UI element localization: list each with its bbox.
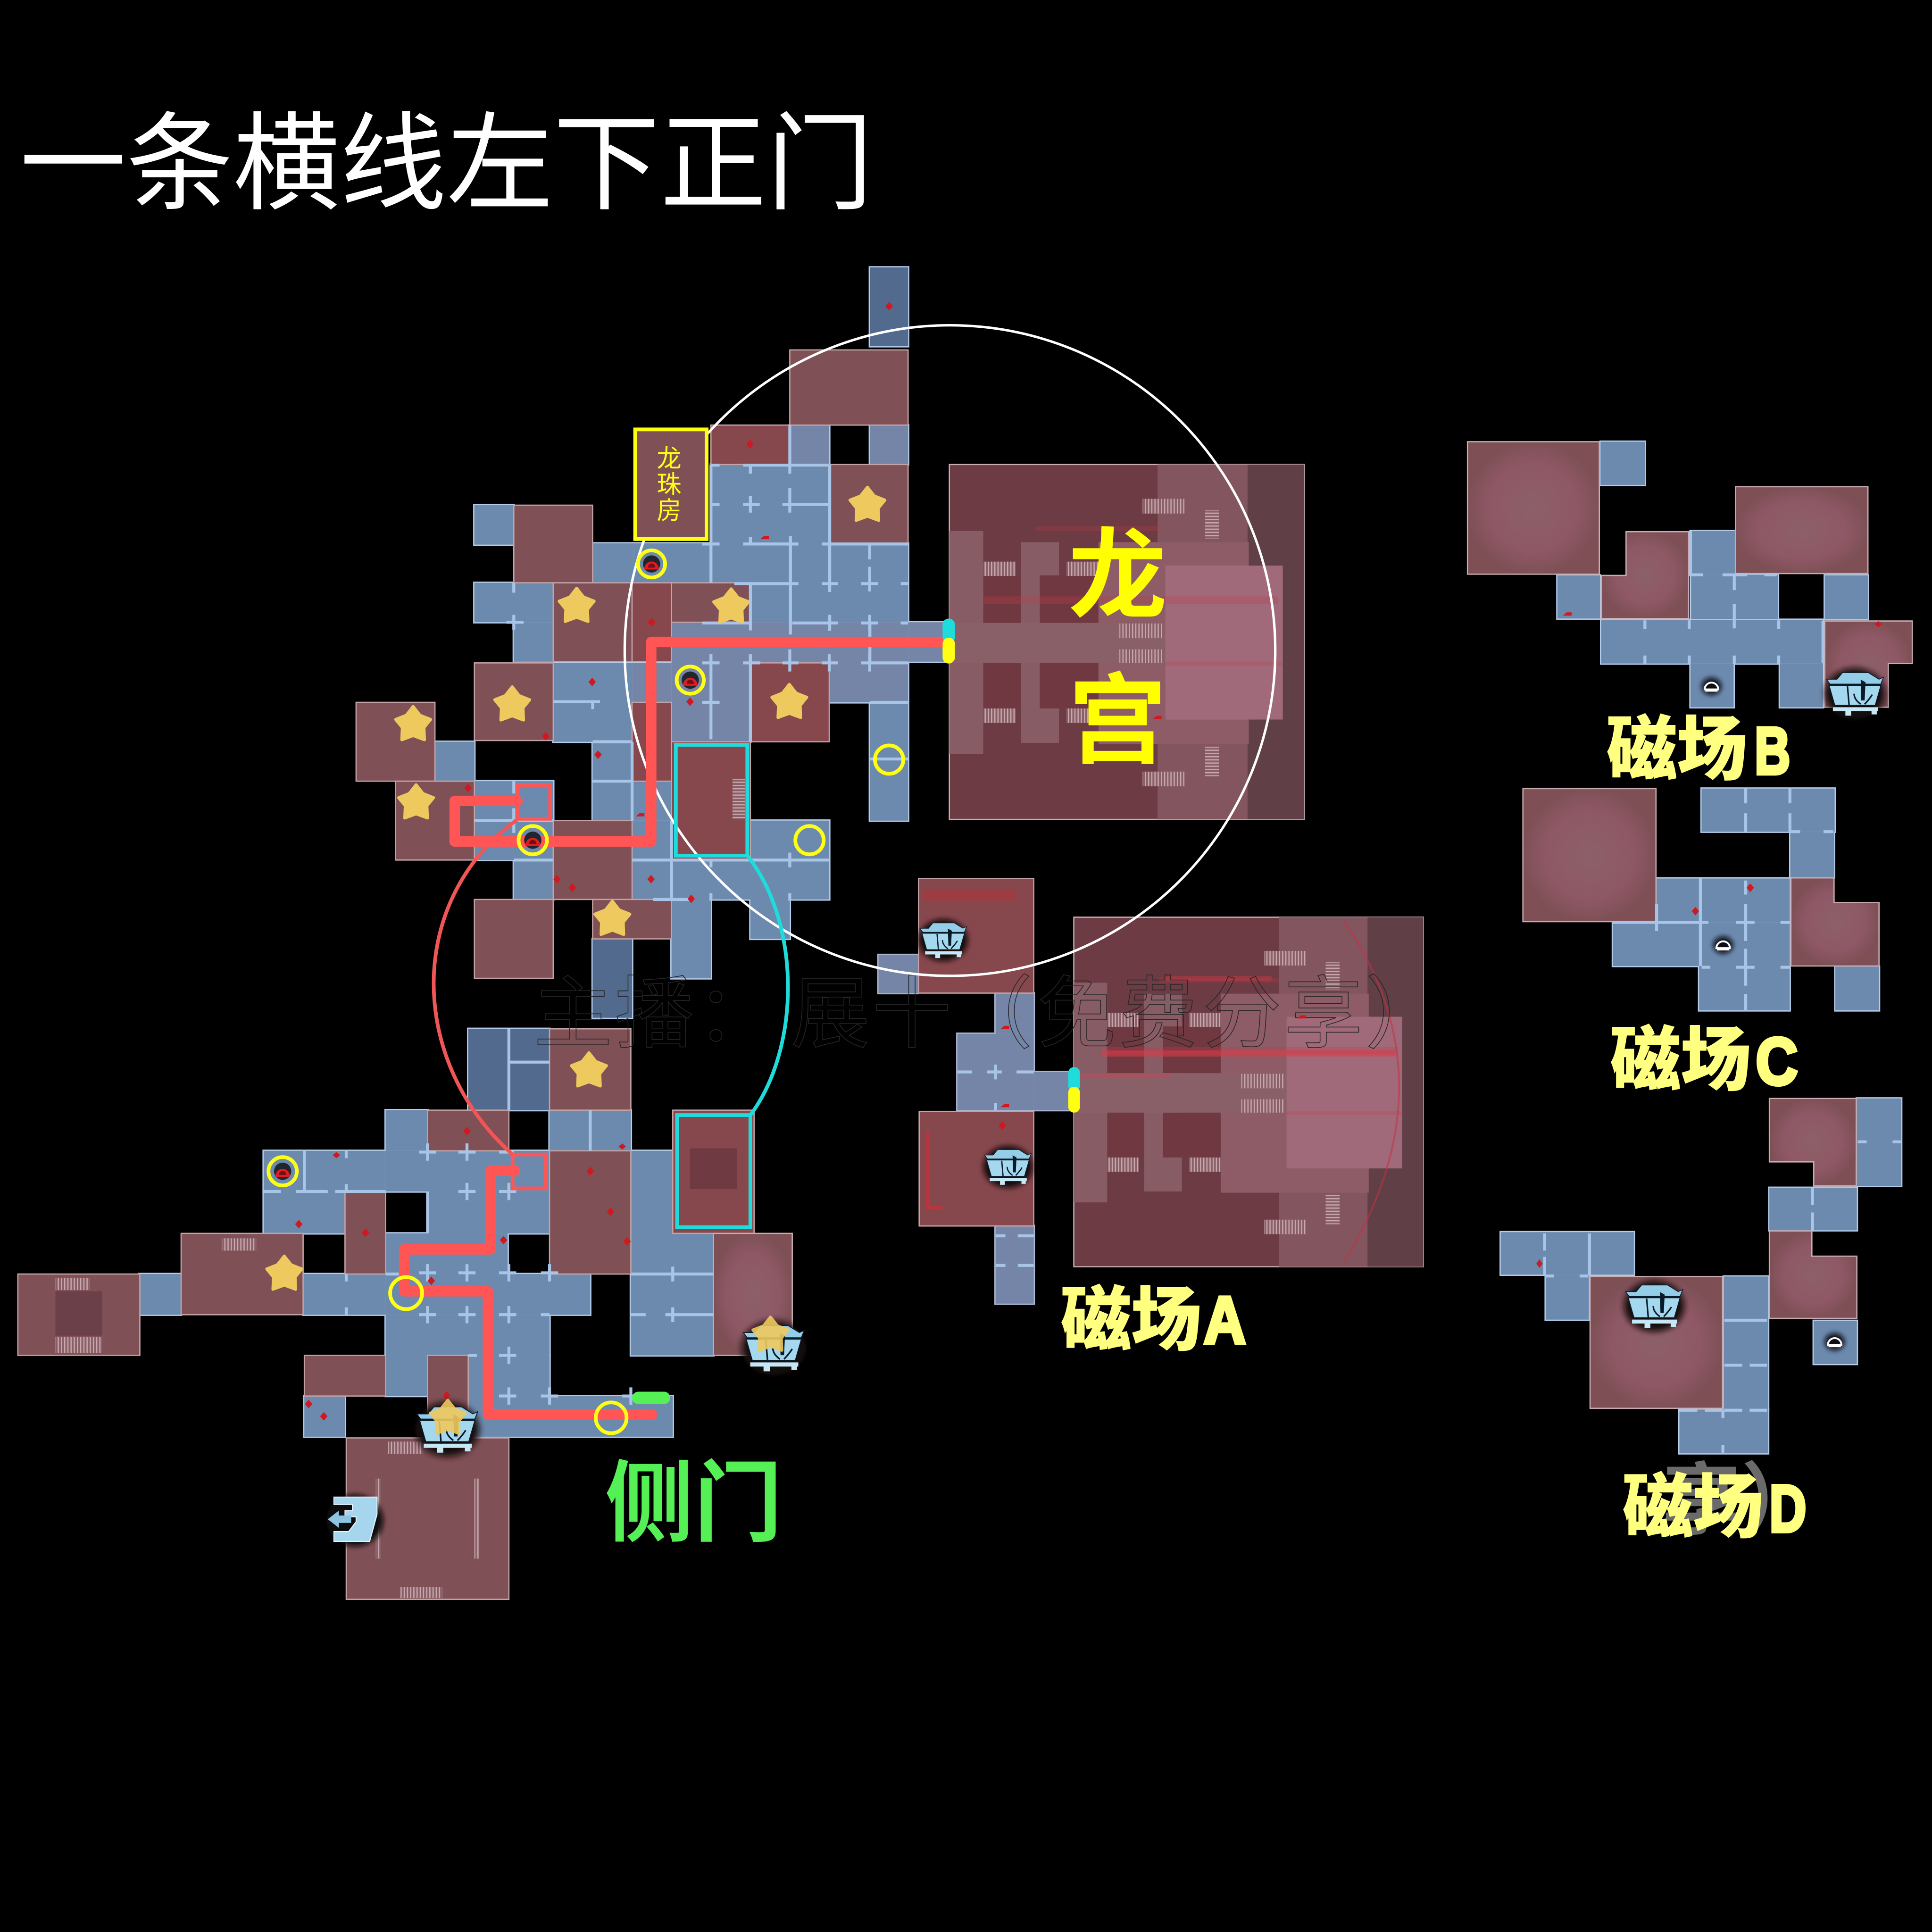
icon: helmet in field D — [1825, 1333, 1845, 1350]
yellow ring marker — [596, 1402, 626, 1433]
panel: dragon ball room — [635, 429, 707, 539]
panel: magnetic field B rooms — [1467, 441, 1912, 707]
yellow marker: dome with ring — [638, 550, 665, 577]
big white range circle — [625, 325, 1275, 976]
star — [572, 1053, 607, 1086]
label: magnetic field D: D — [1769, 1471, 1807, 1546]
label: dragon palace — [1068, 521, 1167, 776]
panel: magnetic field A side rooms — [879, 879, 1073, 1304]
yellow ring marker — [875, 745, 903, 774]
label: magnetic field A: A — [1204, 1282, 1246, 1357]
green side door pill — [632, 1392, 670, 1404]
icon: exit arrow — [326, 1495, 383, 1546]
icon: chest lower right of main map — [742, 1321, 806, 1375]
label: magnetic field D: 磁场 — [1623, 1468, 1763, 1547]
red route lower — [404, 1171, 652, 1415]
star — [559, 588, 594, 622]
watermark ghost behind label D: 享） — [1662, 1457, 1820, 1545]
yellow marker: dome with ring — [268, 1157, 297, 1185]
star — [850, 487, 885, 520]
red enemy markers — [295, 302, 1882, 1421]
icon: helmet in field C — [1713, 936, 1733, 954]
panel: dragon ball room: 龙 — [657, 445, 682, 473]
star over chest — [753, 1317, 788, 1350]
cyan highlighted lower room — [677, 1115, 750, 1227]
small red box upper — [517, 785, 550, 819]
title: 一条横线左下正门 — [20, 104, 874, 224]
label: magnetic field C: 磁场 — [1610, 1021, 1751, 1099]
label: magnetic field A: 磁场 — [1061, 1281, 1201, 1359]
icon: chest in field B — [1825, 668, 1885, 719]
label: side door: 侧门 — [605, 1454, 783, 1553]
star — [714, 589, 749, 622]
magnetic field A door pills — [1068, 1067, 1080, 1113]
yellow ring marker — [795, 826, 824, 854]
icon: helmet in field B — [1702, 678, 1721, 695]
panel: dragon ball room: 房 — [657, 497, 682, 525]
label: dragon palace: 宫 — [1068, 666, 1167, 776]
panel: magnetic field D rooms — [1501, 1099, 1901, 1453]
yellow ring marker — [390, 1277, 422, 1309]
yellow marker: dome with ring — [518, 826, 547, 854]
cyan curved link — [748, 857, 788, 1115]
panel: magnetic field C rooms — [1523, 789, 1879, 1010]
icon: chest in field A top room — [918, 919, 968, 961]
yellow marker: dome with ring — [677, 666, 704, 694]
panel: dragon ball room: 珠 — [657, 471, 682, 499]
star — [267, 1256, 302, 1289]
star — [595, 901, 630, 934]
star — [399, 785, 433, 818]
star over chest — [430, 1400, 465, 1433]
label: magnetic field B: 磁场 — [1607, 710, 1747, 789]
panel: dragon palace room — [949, 465, 1304, 819]
dragon palace door pills — [942, 618, 955, 664]
red curved link — [433, 819, 517, 1155]
star — [396, 707, 431, 740]
panel: lower main map rooms — [18, 1029, 792, 1599]
watermark: streamer credit: 主播：展十（免费分享） — [533, 970, 1444, 1058]
icon: chest at bottom of main map — [415, 1402, 479, 1457]
small red box lower — [513, 1155, 546, 1189]
panel: magnetic field A palace room — [1073, 917, 1424, 1267]
star — [772, 684, 807, 717]
icon: chest in field D — [1624, 1281, 1684, 1332]
red route upper — [455, 642, 940, 841]
star — [495, 687, 530, 720]
cyan highlighted upper room — [676, 745, 747, 856]
icon: chest in field A lower room — [983, 1146, 1033, 1188]
label: magnetic field C: C — [1756, 1024, 1798, 1099]
label: dragon palace: 龙 — [1068, 521, 1167, 631]
panel: upper main map rooms — [356, 267, 949, 1018]
label: magnetic field B: B — [1755, 713, 1790, 788]
